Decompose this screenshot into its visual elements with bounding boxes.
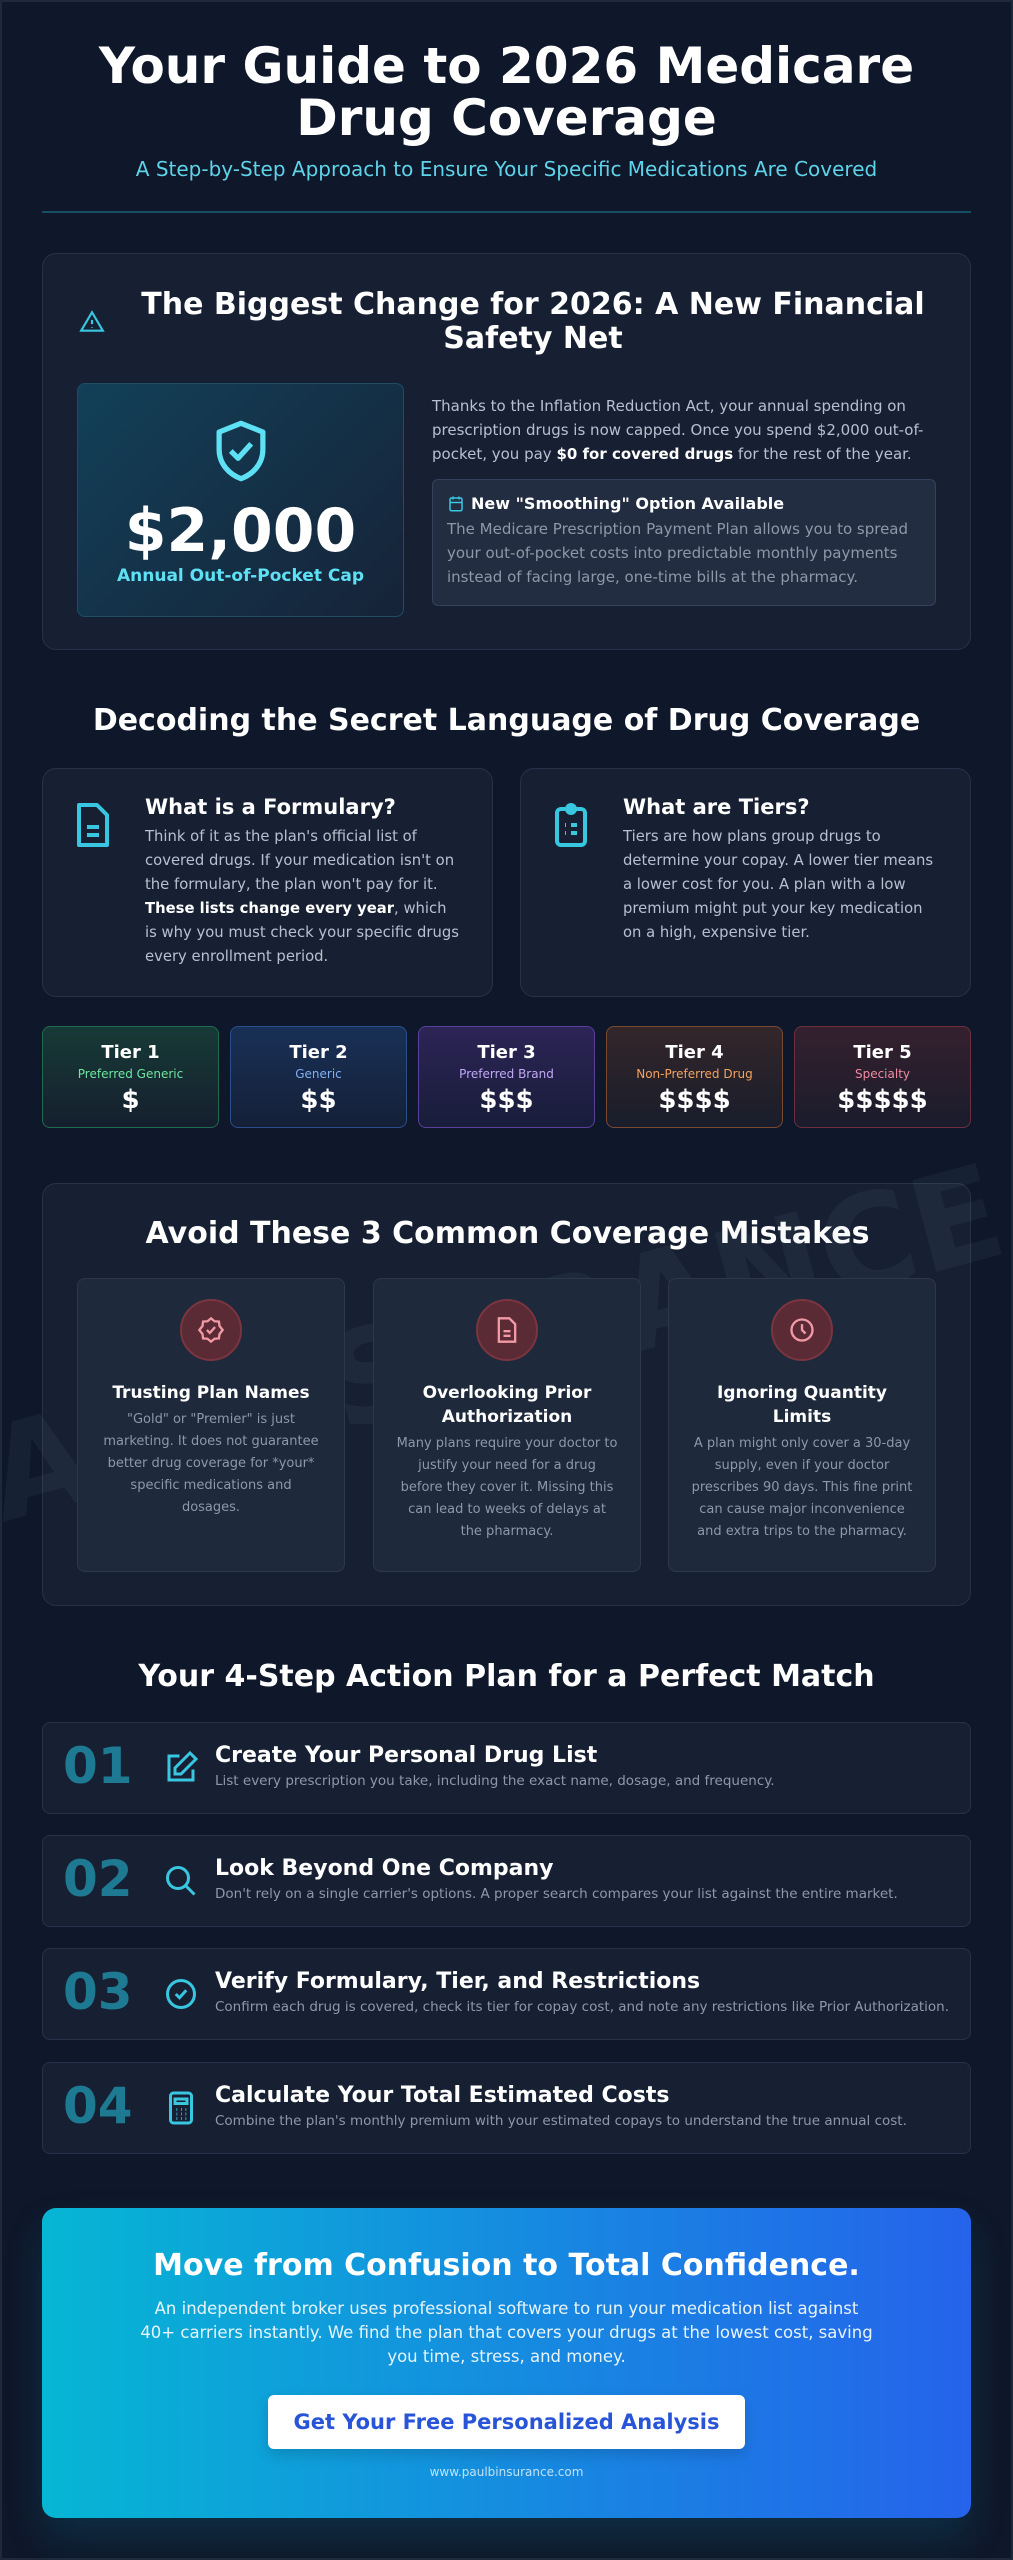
step 2: Look Beyond One Company <box>215 1856 553 1881</box>
tier 4: $$$$ <box>658 1085 731 1115</box>
step 1: Create Your Personal Drug List <box>215 1743 597 1768</box>
step 4 <box>42 2062 971 2154</box>
tier 1: Tier 1 <box>101 1042 160 1063</box>
tier 1 <box>42 1026 219 1128</box>
icon: shield <box>216 420 266 482</box>
panel: formulary <box>42 768 493 997</box>
text <box>140 2299 873 2366</box>
icon: badge <box>180 1299 242 1361</box>
tier 4 <box>606 1026 783 1128</box>
tier 2 <box>230 1026 407 1128</box>
step 3: Verify Formulary, Tier, and Restrictions <box>215 1969 700 1994</box>
heading: Avoid These 3 Common Coverage Mistakes <box>146 1216 869 1251</box>
mistake card 2: Overlooking Prior Authorization <box>423 1383 591 1427</box>
text block: Thanks to the Inflation Reduction Act, your annual spending on prescription drugs is now capped. Once you spend $2,000 out-of-pocket, you pay $0 for covered drugs for the rest of the year. <box>432 397 923 463</box>
tier 1: $ <box>121 1085 140 1115</box>
icon: check circle <box>166 1979 196 2009</box>
tier 3: $$$ <box>479 1085 534 1115</box>
step 2 <box>42 1835 971 1927</box>
step 1 <box>42 1722 971 1814</box>
panel: tiers: Tiers are how plans group drugs to determine your copay. A lower tier means a lower cost for you. A plan with a low premium might put your key medication on a high, expensive tier. <box>623 828 933 941</box>
step 3 <box>42 1948 971 2040</box>
step 2: Don't rely on a single carrier's options. A proper search compares your list against the entire market. <box>215 1886 898 1902</box>
button: Get Your Free Personalized Analysis <box>293 2410 720 2434</box>
panel: tiers: What are Tiers? <box>623 795 810 819</box>
step 2: 02 <box>63 1850 133 1908</box>
icon: clock <box>771 1299 833 1361</box>
icon: calculator <box>169 2092 193 2124</box>
icon: document <box>476 1299 538 1361</box>
step 4: 04 <box>63 2077 133 2135</box>
step 1: 01 <box>63 1737 133 1795</box>
heading: Move from Confusion to Total Confidence. <box>153 2248 860 2283</box>
tier 2: Generic <box>295 1067 342 1081</box>
callout: smoothing: New "Smoothing" Option Available <box>471 494 784 513</box>
icon: clipboard <box>555 803 587 847</box>
icon: document <box>77 803 109 847</box>
icon: search <box>166 1866 196 1896</box>
tier 5: $$$$$ <box>837 1085 928 1115</box>
panel: mistakes <box>42 1183 971 1606</box>
tier 3: Preferred Brand <box>459 1067 554 1081</box>
title <box>98 37 914 147</box>
mistake card 2 <box>373 1278 641 1572</box>
text: 40+ carriers instantly. We find the plan that covers your drugs at the lowest cost, saving you time, stress, and money. <box>140 2323 873 2366</box>
tier 5: Specialty <box>855 1067 910 1081</box>
tier 4: Non-Preferred Drug <box>636 1067 753 1081</box>
stat box: $2,000 <box>125 496 356 566</box>
heading <box>141 287 925 356</box>
callout: smoothing: The Medicare Prescription Payment Plan allows you to spread your out-of-pocket costs into predictable monthly payments instead of facing large, one-time bills at the pharmacy. <box>447 520 908 586</box>
panel: tiers <box>520 768 971 997</box>
mistake card 1: "Gold" or "Premier" is just marketing. It does not guarantee better drug coverage for *your* specific medications and dosages. <box>103 1412 319 1515</box>
tier 2: Tier 2 <box>289 1042 348 1063</box>
step 1: List every prescription you take, including the exact name, dosage, and frequency. <box>215 1773 775 1789</box>
panel: biggest change <box>42 253 971 650</box>
tier 4: Tier 4 <box>665 1042 724 1063</box>
panel: call to action <box>42 2208 971 2518</box>
stat box: Annual Out-of-Pocket Cap <box>117 566 364 586</box>
heading: decoding: Decoding the Secret Language of Drug Coverage <box>93 703 920 738</box>
mistake card 1: Trusting Plan Names <box>112 1383 310 1403</box>
step 4: Calculate Your Total Estimated Costs <box>215 2083 669 2108</box>
icon: edit <box>168 1751 198 1782</box>
mistake card 2: Many plans require your doctor to justify your need for a drug before they cover it. Missing this can lead to weeks of delays at the pharmacy. <box>397 1436 617 1539</box>
heading: action plan: Your 4-Step Action Plan for a Perfect Match <box>138 1659 875 1694</box>
url: www.paulbinsurance.com <box>430 2465 583 2479</box>
tier 3: Tier 3 <box>477 1042 536 1063</box>
mistake card 3 <box>668 1278 936 1572</box>
tier 5 <box>794 1026 971 1128</box>
step 3: 03 <box>63 1963 133 2021</box>
mistake card 3: Ignoring Quantity Limits <box>717 1383 887 1427</box>
tier 3 <box>418 1026 595 1128</box>
title: Drug Coverage <box>296 89 717 147</box>
stat box <box>77 383 404 617</box>
step 4: Combine the plan's monthly premium with your estimated copays to understand the true annual cost. <box>215 2113 907 2129</box>
panel: formulary: What is a Formulary? <box>145 795 396 819</box>
tier 1: Preferred Generic <box>78 1067 183 1081</box>
tier 2: $$ <box>300 1085 337 1115</box>
mistake card 3: A plan might only cover a 30-day supply, even if your doctor prescribes 90 days. This fine print can cause major inconvenience and extra trips to the pharmacy. <box>692 1436 912 1539</box>
subtitle: A Step-by-Step Approach to Ensure Your Specific Medications Are Covered <box>136 157 877 181</box>
callout: smoothing <box>432 479 936 606</box>
mistake card 1 <box>77 1278 345 1572</box>
step 3: Confirm each drug is covered, check its tier for copay cost, and note any restrictions like Prior Authorization. <box>215 1999 949 2015</box>
button <box>268 2395 745 2449</box>
title: Your Guide to 2026 Medicare <box>99 37 914 95</box>
heading: The Biggest Change for 2026: A New Financial <box>141 287 925 322</box>
panel: formulary: Think of it as the plan's official list of covered drugs. If your medication isn't on the formulary, the plan won't pay for it. These lists change every year, which is why you must check your specific drugs every enrollment period. <box>145 828 459 965</box>
heading: Safety Net <box>443 321 623 356</box>
text: An independent broker uses professional software to run your medication list against <box>155 2299 858 2318</box>
tier 5: Tier 5 <box>853 1042 912 1063</box>
icon: warning <box>79 310 105 332</box>
